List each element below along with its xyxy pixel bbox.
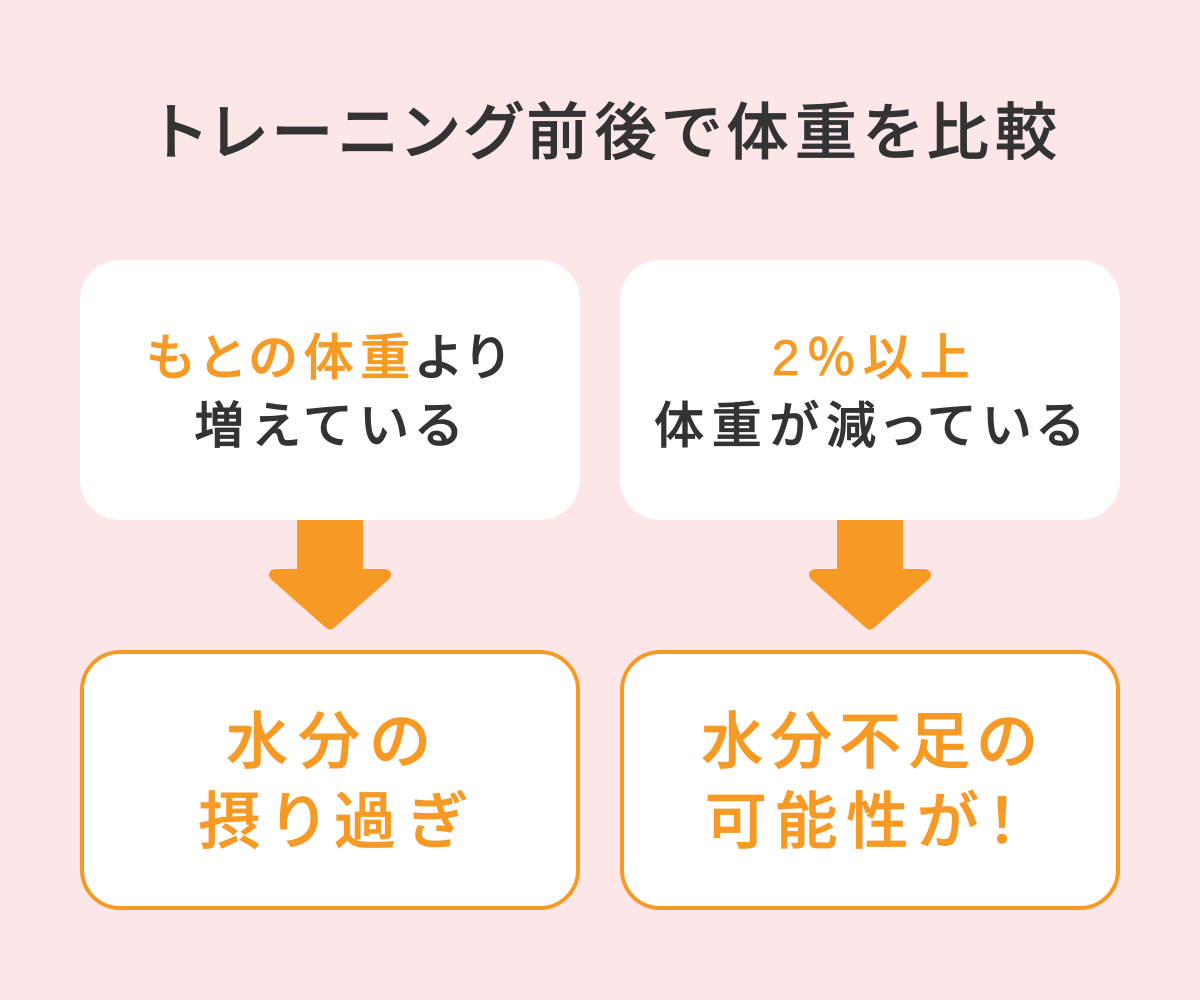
text: excessive intake: 摂り過ぎ <box>198 788 474 857</box>
panel: result possible dehydration <box>620 650 1120 910</box>
text: possibility: 可能性が！ <box>705 788 1026 857</box>
text: weight is decreasing: 体重が減っている <box>654 398 1090 454</box>
panel: weight increased <box>80 260 580 520</box>
text: 2 percent or more: 2％以上 <box>772 330 976 386</box>
title: トレーニング前後で体重を比較 <box>157 99 1063 168</box>
arrow: right <box>809 520 931 630</box>
text: second line: 増えている <box>194 398 470 454</box>
text: dehydration: 水分不足の <box>701 708 1044 777</box>
panel: weight decreased <box>620 260 1120 520</box>
text: first line: もとの体重より <box>146 330 514 386</box>
panel: result excessive water intake <box>80 650 580 910</box>
arrow: left <box>269 520 391 630</box>
text: water: 水分の <box>226 708 440 777</box>
